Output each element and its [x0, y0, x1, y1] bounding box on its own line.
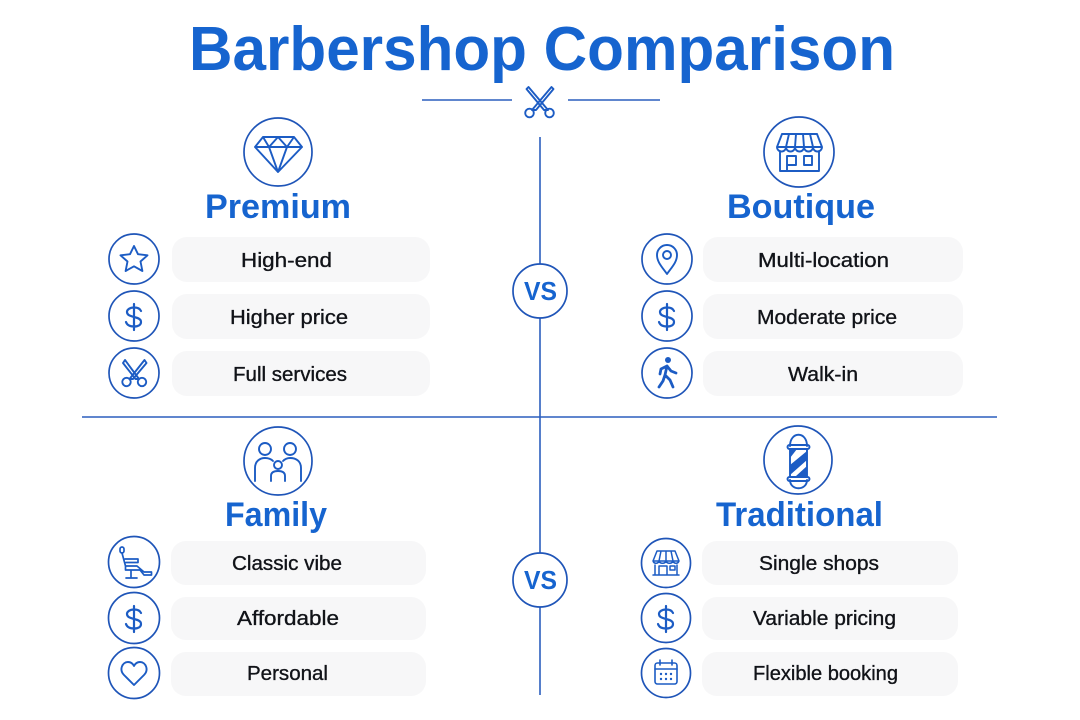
row: Multi-location [642, 234, 963, 284]
row: Moderate price: Moderate price [757, 306, 897, 329]
row: Classic vibe [108, 536, 426, 588]
VS badge bottom [513, 553, 567, 607]
row: Full services [109, 348, 430, 398]
panel: Boutique [642, 117, 963, 398]
row: Higher price [109, 291, 430, 341]
row: Higher price: Higher price [230, 306, 348, 329]
panel: Premium [109, 118, 430, 398]
row: Flexible booking [642, 648, 958, 698]
row: Moderate price [642, 291, 963, 341]
row: Personal [108, 648, 426, 698]
heading: Traditional: Traditional [716, 496, 883, 534]
row: Walk-in: Walk-in [788, 363, 858, 386]
row: Multi-location: Multi-location [758, 249, 889, 272]
heading: Family: Family [225, 496, 327, 534]
row: Single shops [642, 538, 958, 588]
row: High-end [109, 234, 430, 284]
icon: storefront [764, 117, 834, 187]
row: Walk-in [642, 348, 963, 398]
panel: Traditional [642, 426, 958, 698]
icon: family [244, 427, 312, 495]
title: Barbershop Comparison [189, 15, 895, 84]
VS badge top: VS [524, 276, 557, 306]
row: Affordable [108, 592, 426, 644]
row: High-end: High-end [241, 249, 332, 272]
icon: barber pole [764, 426, 832, 494]
row: Full services: Full services [233, 363, 347, 386]
VS badge top [513, 264, 567, 318]
icon: diamond [244, 118, 312, 186]
row: Personal: Personal [247, 662, 328, 685]
VS badge bottom: VS [524, 565, 557, 595]
row: Affordable: Affordable [237, 607, 339, 630]
heading: Premium: Premium [205, 188, 351, 226]
row: Variable pricing: Variable pricing [753, 607, 896, 630]
heading: Boutique: Boutique [727, 188, 875, 226]
row: Classic vibe: Classic vibe [232, 552, 342, 575]
row: Variable pricing [642, 594, 958, 642]
row: Single shops: Single shops [759, 552, 879, 575]
panel: Family [108, 427, 426, 698]
row: Flexible booking: Flexible booking [753, 662, 898, 685]
title ornament: scissors divider [422, 87, 660, 117]
